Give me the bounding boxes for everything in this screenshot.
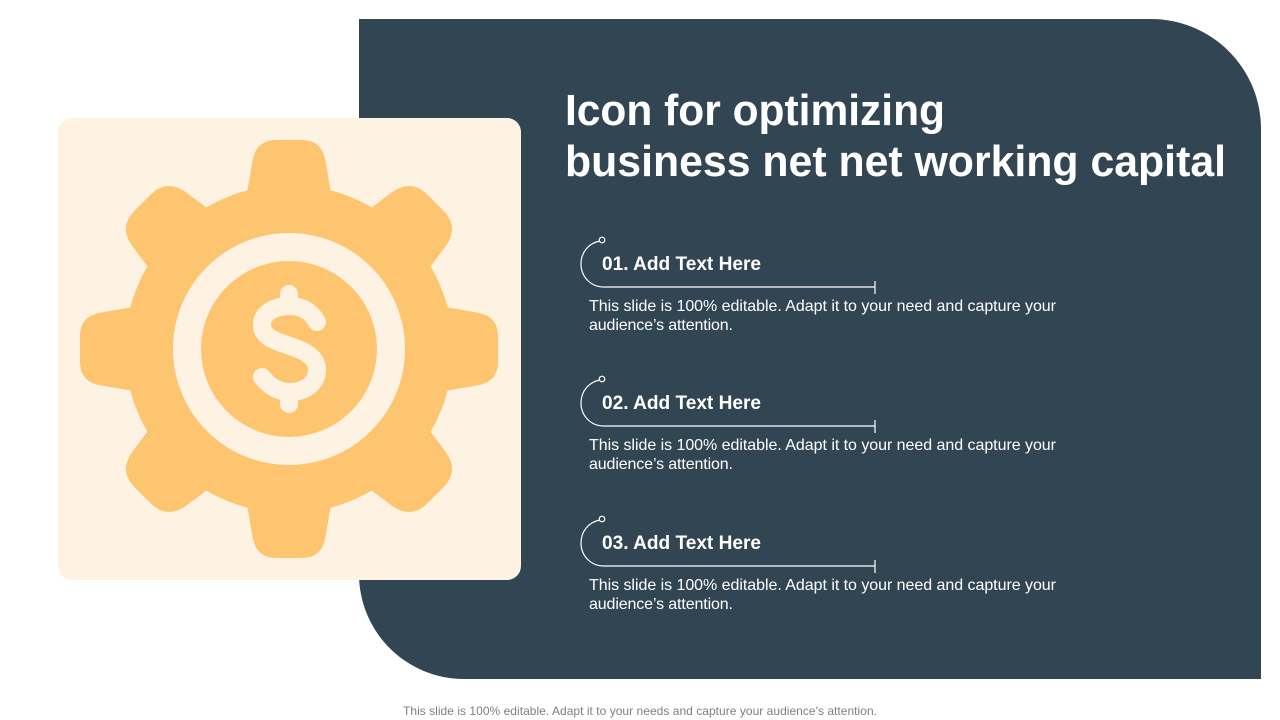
panel: icon card	[58, 118, 521, 580]
item 01 body text: This slide is 100% editable. Adapt it to your need and capture your	[589, 298, 1057, 315]
item 01	[581, 237, 1057, 334]
footer note: This slide is 100% editable. Adapt it to your needs and capture your audience's attention.	[403, 704, 877, 718]
item 03 heading: 03. Add Text Here	[602, 533, 761, 554]
item 01 body text: audience’s attention.	[589, 317, 733, 334]
item 02 body text	[589, 437, 1057, 473]
title: business net net working capital	[565, 137, 1226, 186]
item 03 connector	[581, 516, 875, 573]
item 03 body text: This slide is 100% editable. Adapt it to your need and capture your	[589, 577, 1057, 594]
dark background panel	[359, 19, 1261, 679]
item 03 body text: audience’s attention.	[589, 596, 733, 613]
item 02 body text: audience’s attention.	[589, 456, 733, 473]
item 02 connector	[581, 376, 875, 433]
title: Icon for optimizing	[565, 86, 945, 135]
item 03	[581, 516, 1057, 613]
item 01 body text	[589, 298, 1057, 334]
item 01 heading: 01. Add Text Here	[602, 254, 761, 275]
item 01 connector	[581, 237, 875, 294]
item 02 heading: 02. Add Text Here	[602, 393, 761, 414]
item 02 body text: This slide is 100% editable. Adapt it to your need and capture your	[589, 437, 1057, 454]
title	[565, 86, 1226, 186]
icon: dollar sign	[262, 294, 317, 404]
item 03 body text	[589, 577, 1057, 613]
item 02	[581, 376, 1057, 473]
icon: gear with dollar sign	[80, 140, 498, 558]
